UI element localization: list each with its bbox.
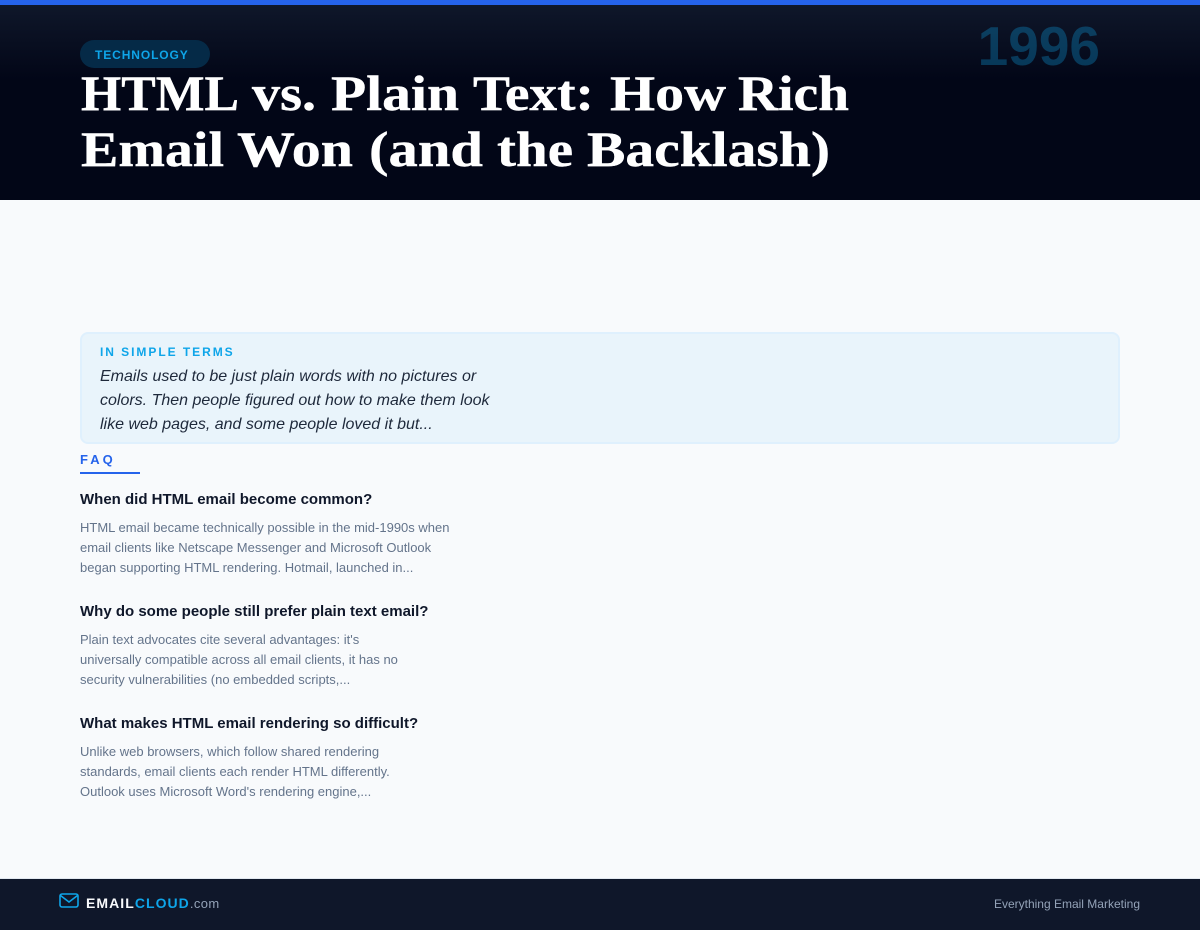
- icon: envelope: [59, 893, 79, 908]
- answer 2: universally compatible across all email clients, it has no: [80, 652, 398, 667]
- question 2: Why do some people still prefer plain text email?: [80, 603, 428, 620]
- callout text: colors. Then people figured out how to make them look: [100, 392, 490, 409]
- question 3: What makes HTML email rendering so difficult?: [80, 715, 418, 732]
- answer 2: security vulnerabilities (no embedded scripts,...: [80, 672, 350, 687]
- callout label: IN SIMPLE TERMS: [100, 345, 235, 359]
- title: vs.: [252, 65, 316, 121]
- answer 3: Outlook uses Microsoft Word's rendering engine,...: [80, 784, 371, 799]
- answer 1: [80, 520, 449, 575]
- category pill: [80, 40, 210, 68]
- answer 3: standards, email clients each render HTML differently.: [80, 764, 390, 779]
- answer 2: [80, 632, 398, 687]
- answer 3: [80, 744, 390, 799]
- callout text: like web pages, and some people loved it but...: [100, 416, 433, 433]
- title: Backlash): [587, 121, 830, 177]
- callout text: [100, 368, 490, 433]
- title: Rich: [738, 65, 849, 121]
- title: Text:: [473, 65, 594, 121]
- header banner: [0, 0, 1200, 200]
- FAQ item 2: [80, 603, 428, 687]
- panel: in simple terms callout: [80, 332, 1120, 444]
- title: Won: [237, 121, 353, 177]
- answer 2: Plain text advocates cite several advantages: it's: [80, 632, 359, 647]
- answer 1: HTML email became technically possible in the mid-1990s when: [80, 520, 449, 535]
- top accent bar: [0, 0, 1200, 5]
- FAQ item 3: [80, 715, 418, 799]
- answer 1: began supporting HTML rendering. Hotmail, launched in...: [80, 560, 413, 575]
- question 1: When did HTML email become common?: [80, 491, 372, 508]
- FAQ item 1: [80, 491, 449, 575]
- title: Email: [81, 121, 224, 177]
- footer: [0, 878, 1200, 930]
- title: HTML: [81, 65, 239, 121]
- title: (and: [369, 121, 483, 177]
- brand wordmark: EMAILCLOUD.com: [86, 895, 220, 911]
- title: How: [610, 65, 726, 121]
- title: the: [497, 121, 573, 177]
- answer 1: email clients like Netscape Messenger and Microsoft Outlook: [80, 540, 431, 555]
- callout text: Emails used to be just plain words with no pictures or: [100, 368, 476, 385]
- category pill: TECHNOLOGY: [95, 48, 189, 62]
- title: Plain: [331, 65, 459, 121]
- tagline: Everything Email Marketing: [994, 897, 1140, 911]
- answer 3: Unlike web browsers, which follow shared rendering: [80, 744, 379, 759]
- FAQ heading: FAQ: [80, 452, 116, 467]
- year watermark: 1996: [978, 15, 1100, 77]
- title: [81, 65, 849, 177]
